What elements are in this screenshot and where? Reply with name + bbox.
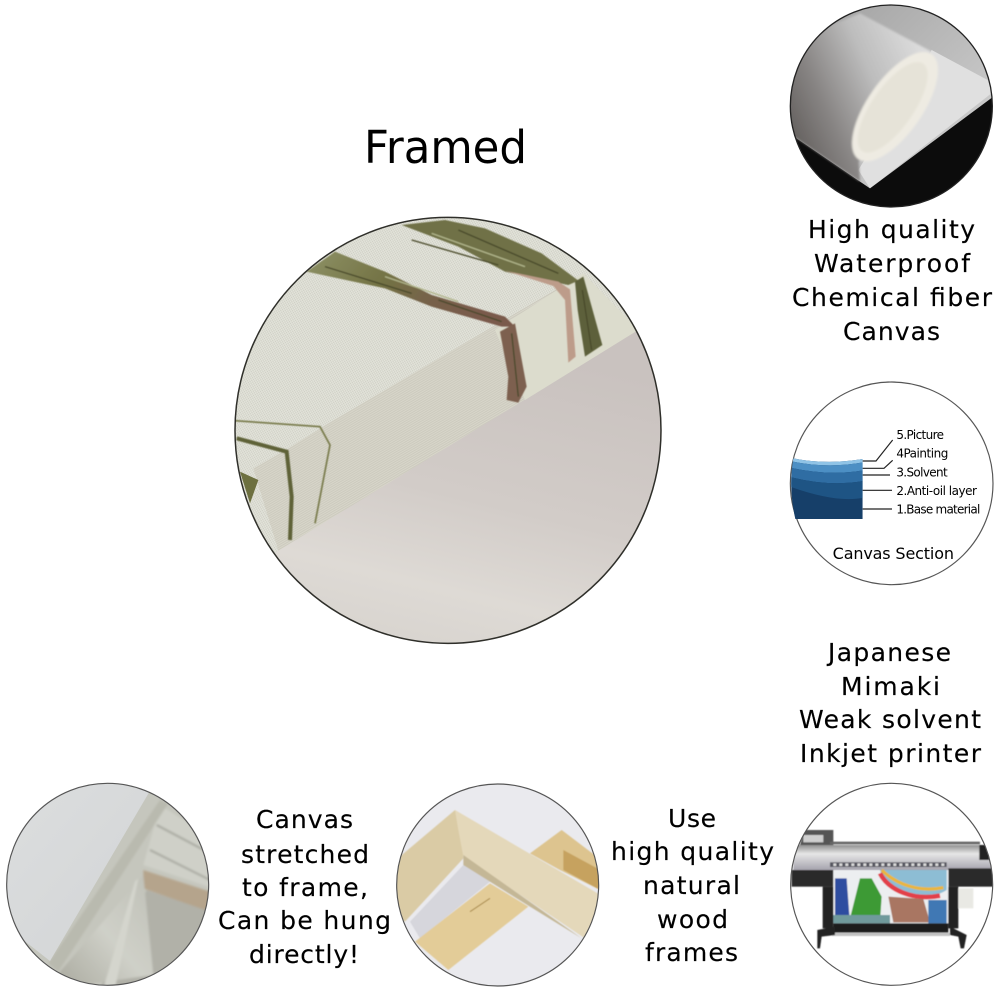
text: canvas stretched: Can be hung [218,906,391,935]
text: printer heading: Mimaki [841,672,940,701]
printer head [793,845,993,870]
text: high quality canvas: Canvas [843,317,940,346]
leaf bands [235,220,602,540]
canvas edge [48,800,168,972]
caption: Canvas Section [833,544,954,563]
roll body and opening [791,13,938,182]
printer arms [792,870,833,887]
text: natural wood frames: high quality [611,837,774,866]
layer labels: 3.Solvent [896,465,948,479]
title: Framed [364,121,527,174]
back frame [415,883,528,970]
back bars [145,810,208,886]
canvas face [7,784,149,961]
text: canvas stretched: stretched [241,840,369,869]
small leaf [240,472,258,503]
base and stand [833,923,948,933]
text: printer heading [799,638,982,768]
panel: stretched canvas photo [6,782,210,986]
layer labels: 4Painting [896,447,948,461]
text: high quality canvas: High quality [808,215,975,244]
wooden bar [143,870,210,912]
text: high quality canvas: Chemical fiber [792,283,993,312]
text: canvas stretched: to frame, [242,873,368,902]
black table [796,98,992,206]
panel: wooden frames photo [396,783,600,987]
text: high quality canvas: Waterproof [814,249,971,278]
text: natural wood frames: frames [645,938,738,967]
text: canvas stretched: directly! [249,940,359,969]
folded corner [60,880,154,983]
text: printer heading: Weak solvent [799,705,981,734]
front frame [390,810,463,922]
leader lines [863,440,893,509]
text: natural wood frames: natural [643,871,740,900]
panel: canvas section diagram [787,382,993,585]
floor surface [276,332,660,642]
text: canvas stretched [218,805,391,969]
text: high quality canvas [792,215,993,346]
text: natural wood frames: wood [657,905,728,934]
layer labels: 2.Anti-oil layer [896,484,977,498]
layer labels [896,428,980,517]
panel: main framed canvas photo [225,210,672,650]
layer labels: 1.Base material [896,503,980,517]
canvas side face [254,276,579,550]
text: printer heading: Inkjet printer [800,739,982,768]
panel: canvas roll photo [790,4,993,208]
printed image [833,870,948,923]
text: canvas stretched: Canvas [256,805,353,834]
text: printer heading: Japanese [826,638,951,667]
text: natural wood frames: Use [668,804,716,833]
layered canvas illustration [791,458,863,519]
layer labels: 5.Picture [896,428,944,442]
panel: printer photo [791,783,993,985]
text: natural wood frames [611,804,774,967]
flat sheet [858,50,1000,188]
